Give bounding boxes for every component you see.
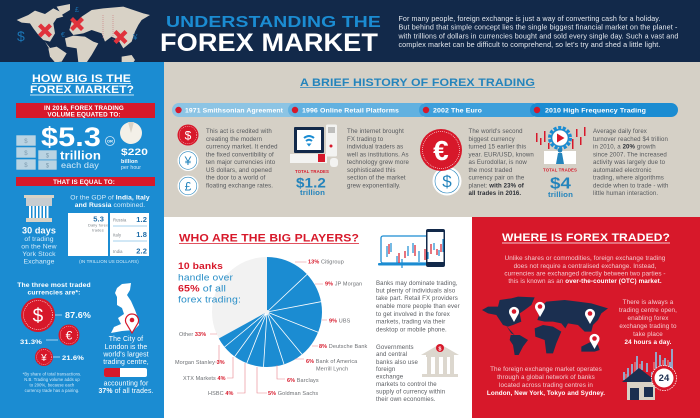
- footnote: to 200%, because each: [30, 382, 75, 388]
- text: city of london: [102, 336, 149, 366]
- text: 2010: turnover reached $4 trillion: [593, 136, 668, 143]
- text: 2010: activity was largely due to: [593, 159, 666, 166]
- text: governments: their own economies.: [376, 396, 436, 403]
- icon: currency coins: ¥: [184, 154, 192, 168]
- chart: currency circles: 87.6%: [65, 311, 91, 320]
- text: 2010: Average daily forex: [593, 128, 647, 135]
- table: gdp values: 1.2: [136, 215, 147, 224]
- figure: 5.3 trillion each day: trillion: [60, 148, 101, 162]
- intro text: with trillions of dollars in currencies bought and sold every single day. Such a vast and: [397, 32, 678, 40]
- text: 2002: year. EUR/USD, known: [468, 151, 534, 158]
- text: 2010: automated electronic: [593, 167, 652, 174]
- text: 1996: individual traders as: [347, 144, 403, 150]
- heading: three currencies: [17, 282, 91, 296]
- text: 2002: planet: with 23% of: [468, 182, 525, 189]
- text: 10 banks: forex trading:: [178, 294, 241, 306]
- header band: [0, 0, 700, 62]
- icon: bank building: $: [438, 346, 442, 352]
- icon: money stacks: [16, 135, 57, 170]
- icon: stock exchange building: [24, 195, 54, 222]
- text: over the counter: currencies are exchanged directly between two parties -: [504, 270, 666, 278]
- intro text: But behind that simple concept lies the single biggest financial market on the planet -: [398, 24, 678, 32]
- timeline bars: 2002 The Euro: [433, 107, 482, 114]
- text: governments: and central: [376, 351, 407, 358]
- text: accounting for 37 percent: accounting for: [104, 380, 149, 388]
- text: governments: Governments: [376, 344, 414, 351]
- text: global network: located across trading centres in: [499, 382, 593, 389]
- text: 1996: well as institutions. As: [346, 151, 409, 158]
- text: 1971: the fixed convertibility of: [206, 151, 274, 158]
- text: 1996: The internet brought: [347, 128, 404, 135]
- title: [160, 14, 381, 57]
- text: global network: [487, 366, 605, 397]
- icon: euro and dollar coins: [420, 129, 462, 196]
- intro text: [397, 15, 678, 49]
- pie chart: bank shares: [212, 257, 322, 367]
- heading: three currencies: The three most traded: [17, 282, 91, 289]
- icon: house with candlesticks and 24 hour clock: [622, 349, 676, 400]
- text: 2010: decide when to trade - with: [593, 182, 669, 189]
- icon: money stacks: $: [24, 163, 28, 169]
- pie labels: 6% Barclays: [287, 378, 319, 384]
- chart: currency circles: [20, 298, 91, 366]
- text: 1971: creating the modern: [206, 136, 262, 143]
- icon: laptop and phone with candlestick chart: [378, 229, 445, 268]
- text: gdp comparison: [70, 194, 150, 209]
- table: gdp values: Daily forex: [88, 222, 108, 228]
- header world map: £: [75, 7, 79, 14]
- text: banks: but plenty of individuals also: [376, 288, 456, 294]
- text: 30 days: of trading: [24, 236, 54, 243]
- timeline bars: [172, 103, 678, 117]
- figure: 4 trillion: TOTAL TRADES: [543, 168, 577, 172]
- icon: money stacks: $: [46, 164, 50, 170]
- text: 10 banks: 10 banks: [178, 261, 223, 272]
- text: 2002: The world's second: [468, 128, 523, 135]
- world map with location pins: [482, 297, 608, 355]
- text: 30 days: on the New: [21, 244, 57, 250]
- pie labels: Merrill Lynch: [316, 366, 348, 372]
- icon: money stacks: $: [24, 139, 28, 145]
- pie labels: Other 33%: [179, 332, 206, 338]
- figure: 220 billion per hour: $220: [121, 147, 148, 158]
- pie labels: 5% Goldman Sachs: [268, 391, 318, 397]
- icon: computer: [290, 124, 338, 167]
- table: gdp values: India: [113, 249, 123, 254]
- red banner: volume: VOLUME EQUATED TO:: [47, 112, 121, 118]
- title: UNDERSTANDING THE: [166, 14, 381, 31]
- table: gdp values: 2.2: [136, 246, 147, 256]
- intro text: For many people, foreign exchange is just a way of converting cash for a holiday.: [398, 15, 660, 23]
- heading: FOREX MARKET?: [30, 84, 134, 96]
- header world map: €: [61, 32, 65, 39]
- text: 1996: section of the market: [347, 174, 406, 182]
- text: 1971: floating exchange rates.: [206, 182, 273, 189]
- text: accounting for 37 percent: 37% of all trades.: [98, 388, 154, 395]
- heading: WHO ARE THE BIG PLAYERS?: [179, 232, 359, 244]
- icon: house with candlesticks and 24 hour clock: 24: [659, 373, 670, 384]
- icon: euro and dollar coins: $: [442, 172, 452, 191]
- text: 1971: [206, 128, 278, 189]
- text: 1996: [346, 128, 409, 189]
- text: over the counter: [504, 255, 666, 285]
- text: gdp comparison: Or the GDP of India, Italy: [70, 194, 150, 202]
- text: 1996: grew exponentially.: [347, 182, 401, 189]
- bar: 37 percent: [104, 368, 147, 377]
- text: governments: supply of currency within: [376, 388, 445, 396]
- caption: trillion us dollars: (IN TRILLION US DOLLARS): [79, 259, 139, 264]
- text: 1971: ten major currencies into: [206, 159, 276, 166]
- chart: currency circles: 21.6%: [62, 355, 84, 362]
- heading: A BRIEF HISTORY OF FOREX TRADING: [300, 77, 535, 89]
- text: 2010: little human interaction.: [593, 190, 658, 197]
- text: 2010: trading, where algorithms: [593, 174, 664, 182]
- pie labels: 6% Bank of America: [306, 359, 358, 365]
- text: city of london: London is the: [105, 344, 147, 351]
- chart: currency circles: ¥: [40, 353, 47, 364]
- text: 10 banks: handle over: [178, 272, 233, 284]
- header world map: $: [17, 28, 25, 44]
- footnote: *By share of total transactions.: [23, 372, 81, 376]
- text: banks: take part. Retail FX providers: [376, 295, 458, 302]
- text: banks: enable more people than ever: [376, 303, 460, 310]
- text: banks: markets, trading via their: [376, 318, 445, 326]
- or connector: OR: [107, 140, 113, 144]
- heading: [30, 73, 134, 96]
- figure: 5.3 trillion each day: $5.3: [41, 122, 101, 152]
- text: always open: [619, 299, 677, 346]
- text: 1971: This act is credited with: [206, 128, 272, 135]
- text: 30 days: 30 days: [22, 226, 56, 236]
- text: always open: enabling forex: [628, 315, 669, 322]
- text: always open: exchange trading to: [619, 323, 677, 330]
- text: gdp comparison: and Russia combined.: [75, 202, 145, 209]
- table: gdp values: Italy: [113, 232, 122, 238]
- icon: currency coins: [178, 124, 198, 196]
- or connector: [106, 136, 114, 146]
- footnote: currency trade has a pairing.: [25, 388, 79, 393]
- figure: 5.3 trillion each day: each day: [61, 160, 100, 170]
- timeline bars: 1996 Online Retail Platforms: [302, 107, 399, 114]
- pie labels: 8% Deutsche Bank: [319, 344, 368, 350]
- text: 2010: [593, 128, 669, 197]
- figure: 1.2 trillion: TOTAL TRADES: [295, 169, 329, 174]
- text: 10 banks: 65% of all: [178, 284, 226, 294]
- text: always open: There is always a: [623, 299, 674, 306]
- text: governments: banks also use: [376, 359, 419, 366]
- text: 30 days: [21, 226, 57, 266]
- text: 1996: FX trading to: [347, 136, 384, 143]
- text: over the counter: this is known as an over-the-counter (OTC) market.: [508, 278, 662, 285]
- figure: 1.2 trillion: trillion: [300, 190, 325, 197]
- text: 30 days: York Stock: [22, 251, 56, 258]
- red banner: equal: [16, 177, 155, 186]
- figure: 1.2 trillion: [295, 169, 329, 197]
- text: global network: through a global network of banks: [497, 374, 595, 381]
- panel: brief history of forex trading: [164, 62, 700, 217]
- intro text: complex market can be difficult to comprehend, so let's try and shed a little light.: [398, 41, 660, 49]
- pie labels: 9% UBS: [329, 318, 351, 324]
- text: always open: trading centre open,: [619, 307, 677, 314]
- text: 30 days: Exchange: [23, 258, 55, 266]
- figure: 4 trillion: trillion: [548, 192, 573, 199]
- text: 2002: as Eurodollar, is now: [468, 159, 527, 166]
- panel: who are the big players: [164, 217, 472, 418]
- pie labels: Morgan Stanley 3%: [175, 360, 225, 366]
- text: 1996: sophisticated this: [347, 167, 396, 174]
- figure: 4 trillion: $4: [550, 176, 571, 192]
- pie labels: 9% JP Morgan: [325, 282, 362, 288]
- table: gdp values: 5.3: [93, 214, 104, 224]
- footnote: N.B. Trading volume adds up: [24, 377, 80, 382]
- icon: bank building: [421, 344, 459, 377]
- text: over the counter: Unlike shares or commodities, foreign exchange trading: [505, 255, 666, 262]
- text: 2010: since 2007. The increased: [593, 151, 667, 158]
- figure: 220 billion per hour: [121, 147, 148, 171]
- title: FOREX MARKET: [160, 29, 378, 57]
- text: city of london: The City of: [109, 336, 143, 343]
- red banner: equal: THAT IS EQUAL TO:: [53, 179, 115, 186]
- text: 1971: the door to a world of: [206, 174, 266, 182]
- text: always open: 24 hours a day.: [625, 339, 672, 346]
- text: 10 banks: [178, 261, 241, 306]
- chart: currency circles: 31.3%: [20, 339, 42, 346]
- text: governments: [376, 344, 445, 403]
- table: gdp values: trades: [92, 228, 104, 232]
- text: 1971: US dollars, and opened: [206, 167, 272, 174]
- heading: three currencies: currencies are*:: [28, 290, 80, 296]
- text: 2010: in 2010, a 20% growth: [593, 144, 656, 150]
- figure: 220 billion per hour: billion: [121, 159, 138, 165]
- text: 2002: [468, 128, 534, 197]
- text: governments: exchange: [376, 374, 404, 380]
- red banner: volume: [16, 103, 155, 118]
- pie labels: HSBC 4%: [208, 391, 233, 397]
- icon: currency coins: £: [185, 180, 192, 194]
- heading: WHERE IS FOREX TRADED?: [502, 232, 670, 244]
- header world map: [17, 4, 150, 62]
- table: gdp values: [68, 213, 149, 256]
- text: city of london: trading centre,: [103, 359, 149, 366]
- red banner: volume: IN 2016, FOREX TRADING: [44, 105, 124, 112]
- text: 2002: the most traded: [468, 167, 512, 174]
- text: banks: Banks may dominate trading,: [376, 280, 458, 287]
- header world map: ¥: [132, 33, 138, 42]
- figure: 220 billion per hour: per hour: [121, 165, 141, 171]
- heading: HOW BIG IS THE: [32, 73, 131, 85]
- text: accounting for 37 percent: [98, 380, 154, 395]
- text: banks: desktop or mobile phone.: [376, 326, 447, 334]
- text: banks: to get involved in the forex: [376, 311, 450, 318]
- table: gdp values: Russia: [113, 218, 127, 222]
- text: city of london: world's largest: [102, 352, 149, 358]
- text: always open: take place: [633, 331, 663, 338]
- text: global network: London, New York, Tokyo and Sydney.: [487, 390, 605, 397]
- text: 1971: currency market. It ended: [206, 144, 278, 150]
- text: 1996: technology grew more: [347, 159, 409, 166]
- text: global network: The foreign exchange market operates: [490, 366, 602, 373]
- text: over the counter: does not require a centralised exchange. Instead,: [514, 263, 657, 270]
- icon: uk map with pin: [111, 283, 139, 333]
- chart: currency circles: €: [66, 328, 73, 342]
- icon: currency coins: $: [185, 128, 192, 142]
- pie labels: 13% Citigroup: [308, 260, 344, 266]
- timeline bars: 1971 Smithsonian Agreement: [185, 107, 284, 114]
- timeline bars: 2010 High Frequency Trading: [545, 107, 646, 114]
- icon: clock: [120, 122, 142, 144]
- text: 2002: biggest currency: [468, 136, 516, 143]
- panel: how big is the forex market: [0, 62, 164, 418]
- figure: 1.2 trillion: $1.2: [296, 174, 326, 190]
- figure: 4 trillion: [543, 168, 577, 199]
- text: banks: [376, 280, 460, 334]
- footnote: [23, 372, 81, 393]
- icon: money stacks: $: [46, 154, 50, 160]
- text: governments: markets to control the: [376, 381, 437, 388]
- icon: gear with play button and candlesticks: [536, 127, 586, 164]
- panel: where is forex traded: [472, 217, 700, 418]
- text: governments: foreign: [376, 366, 395, 373]
- table: gdp values: 1.8: [136, 230, 147, 239]
- pie labels: [175, 260, 368, 397]
- chart: currency circles: $: [33, 306, 44, 327]
- figure: 5.3 trillion each day: [41, 122, 101, 170]
- text: 2002: all trades in 2016.: [468, 190, 521, 197]
- text: 2002: currency pair on the: [468, 174, 525, 182]
- text: 2002: turned 15 earlier this: [468, 144, 526, 150]
- pie labels: XTX Markets 4%: [183, 376, 226, 382]
- icon: money stacks: $: [24, 151, 28, 157]
- icon: euro and dollar coins: €: [433, 135, 449, 166]
